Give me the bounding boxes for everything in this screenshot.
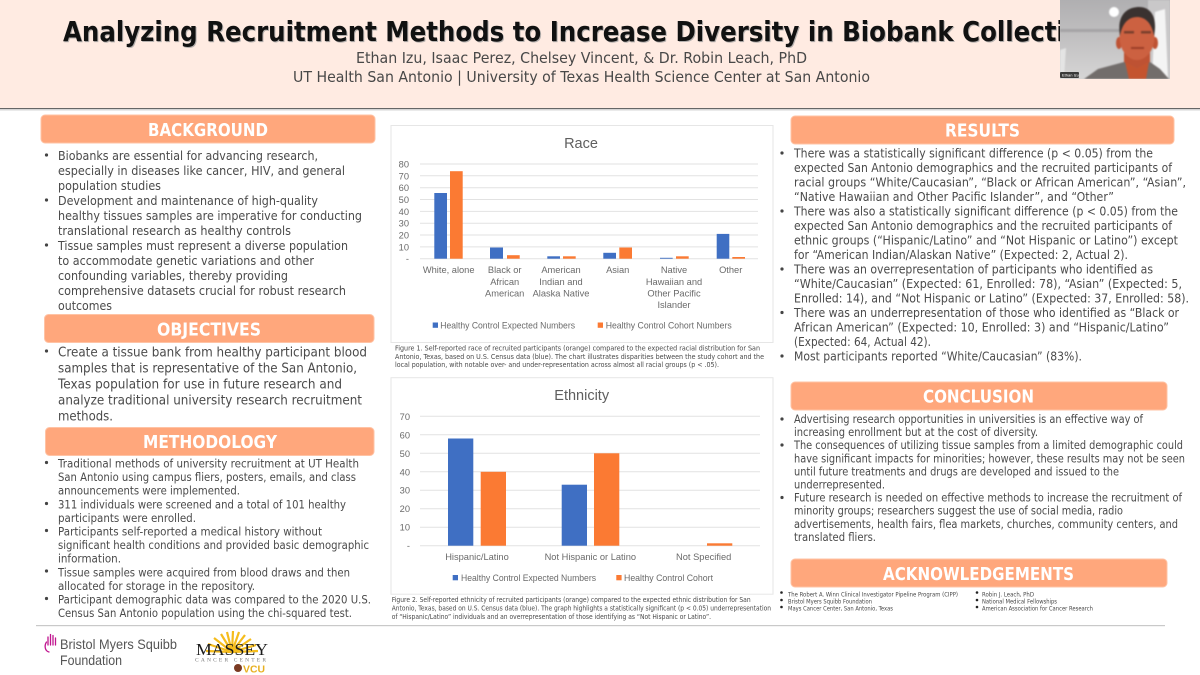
y axis labels: ethnicity: 30 xyxy=(400,486,410,496)
text block: conclusion bullets: Advertising research opportunities in universities is an effective way of xyxy=(794,413,1144,426)
heading: results: RESULTS xyxy=(945,122,1020,142)
text block: methodology bullets: Tissue samples were acquired from blood draws and then xyxy=(57,565,350,579)
category labels: ethnicity: Hispanic/Latino xyxy=(445,552,509,562)
header band xyxy=(0,0,1200,110)
cohort bars: ethnicity xyxy=(481,453,732,546)
y axis labels: ethnicity: 50 xyxy=(400,449,410,459)
text block: methodology bullets: announcements were implemented. xyxy=(58,484,240,498)
text block: acknowledgements left column: Mays Cancer Center, San Antonio, Texas xyxy=(788,606,893,612)
y axis labels: race: 70 xyxy=(399,171,409,181)
text block: conclusion bullets: minority groups; researchers suggest the use of social media, radio xyxy=(794,505,1123,518)
text block: background bullets: comprehensive datasets crucial for robust research xyxy=(58,283,346,298)
text block: objectives bullet: samples that is representative of the San Antonio, xyxy=(58,362,357,376)
text block: methodology bullets: San Antonio using campus fliers, posters, emails, and class xyxy=(58,470,356,484)
heading: conclusion xyxy=(791,382,1167,410)
category labels: race: Alaska Native xyxy=(533,288,589,298)
heading: methodology xyxy=(46,428,374,456)
y axis labels: ethnicity: 40 xyxy=(400,467,410,477)
caption: figure 2 xyxy=(392,595,771,621)
panel: background xyxy=(41,115,375,313)
text block: objectives bullet: Texas population for use in future research and xyxy=(57,378,342,392)
y axis labels: ethnicity: 70 xyxy=(400,412,410,422)
expected bars: race xyxy=(434,193,729,259)
category labels: ethnicity: Not Specified xyxy=(676,552,731,562)
text block: methodology bullets: information. xyxy=(58,552,121,566)
logo: Bristol Myers Squibb Foundation: Bristol Myers Squibb xyxy=(60,636,177,652)
heading: background: BACKGROUND xyxy=(148,121,268,141)
category labels: race: American xyxy=(485,288,524,298)
heading: acknowledgements: ACKNOWLEDGEMENTS xyxy=(883,565,1074,585)
text block: acknowledgements right column: American Association for Cancer Research xyxy=(982,606,1093,612)
y axis labels: race: 10 xyxy=(399,242,409,252)
legend: ethnicity xyxy=(453,573,713,583)
y axis labels: ethnicity: - xyxy=(407,541,410,551)
logo: Massey Cancer Center VCU: MASSEY xyxy=(196,640,268,659)
category labels: race: Hawaiian and xyxy=(646,277,702,287)
affiliation: UT Health San Antonio | University of Texas Health Science Center at San Antonio xyxy=(293,68,870,86)
category labels: ethnicity: Not Hispanic or Latino xyxy=(545,552,636,562)
category labels: race: Other xyxy=(719,265,742,275)
y axis labels: race: - xyxy=(406,254,409,264)
y axis labels: ethnicity: 60 xyxy=(400,430,410,440)
panel: methodology xyxy=(45,428,374,620)
heading: background xyxy=(41,115,375,143)
text block: background bullets: especially in diseases like cancer, HIV, and general xyxy=(58,163,345,178)
text block: conclusion bullets: translated fliers. xyxy=(794,531,876,544)
category labels: race: African xyxy=(490,277,519,287)
text block: conclusion bullets xyxy=(780,413,1185,544)
caption: figure 2: Figure 2. Self-reported ethnicity of recruited participants (orange) compared to the expected ethnic distribution for San xyxy=(392,595,751,604)
text block: conclusion bullets: underrepresented. xyxy=(794,478,885,492)
text block: acknowledgements right column: Robin J. Leach, PhD xyxy=(982,592,1034,598)
text block: acknowledgements left column: Bristol Myers Squibb Foundation xyxy=(788,598,872,606)
caption: figure 1 xyxy=(395,344,764,369)
category labels: race: Black or xyxy=(488,265,521,275)
heading: objectives: OBJECTIVES xyxy=(157,320,261,340)
y axis labels: race: 80 xyxy=(399,160,409,170)
text block: objectives bullet: methods. xyxy=(58,410,113,424)
text block: background bullets: Tissue samples must represent a diverse population xyxy=(57,238,348,253)
heading: objectives xyxy=(44,314,374,342)
text block: objectives bullet: analyze traditional university research recruitment xyxy=(58,394,362,408)
legend: ethnicity: Healthy Control Cohort xyxy=(624,573,713,583)
logo: Massey Cancer Center VCU xyxy=(195,631,268,675)
y axis labels: race: 50 xyxy=(399,195,409,205)
logo: Bristol Myers Squibb Foundation xyxy=(45,634,177,668)
panel: results xyxy=(780,116,1189,364)
panel: conclusion xyxy=(780,382,1185,544)
text block: results bullets: There was an overrepresentation of participants who identified as xyxy=(793,262,1153,276)
text block: results bullets: “Native Hawaiian and Other Pacific Islander”, and “Other” xyxy=(794,190,1114,204)
text block: methodology bullets: Census San Antonio population using the chi-squared test. xyxy=(58,606,352,620)
text block: acknowledgements right column xyxy=(976,591,1093,612)
logo: Massey Cancer Center VCU: CANCER CENTER xyxy=(195,658,266,664)
text block: methodology bullets: Participant demographic data was compared to the 2020 U.S. xyxy=(58,592,371,606)
text block: methodology bullets: participants were enrolled. xyxy=(58,511,196,525)
logo: Bristol Myers Squibb Foundation: Foundation xyxy=(60,652,122,668)
text block: methodology bullets: allocated for storage in the repository. xyxy=(58,579,255,593)
webcam thumbnail of presenter xyxy=(1060,0,1170,79)
text block: background bullets: population studies xyxy=(58,178,161,193)
caption: figure 1: Figure 1. Self-reported race of recruited participants (orange) compared to the expected racial distribution for San xyxy=(395,344,760,352)
authors: Ethan Izu, Isaac Perez, Chelsey Vincent, & Dr. Robin Leach, PhD xyxy=(356,49,807,67)
text block: results bullets: (Expected: 64, Actual 42). xyxy=(794,335,931,349)
text block: results bullets: African American” (Expected: 10, Enrolled: 3) and “Hispanic/Latino” xyxy=(794,320,1169,334)
category labels: race: American xyxy=(541,265,581,275)
cohort bars: race xyxy=(450,171,745,259)
text block: background bullets xyxy=(45,148,362,313)
text block: methodology bullets: Traditional methods of university recruitment at UT Health xyxy=(57,456,359,470)
caption: figure 1: local population, with notable over- and under-representation across almost all racial groups (p < .05). xyxy=(395,360,719,369)
y axis labels: race: 60 xyxy=(399,183,409,193)
panel: objectives xyxy=(44,314,374,424)
text block: results bullets: for “American Indian/Alaskan Native” (Expected: 2, Actual 2). xyxy=(794,248,1128,262)
icon: sunburst xyxy=(206,631,258,652)
text block: background bullets: Development and maintenance of high-quality xyxy=(58,193,318,208)
category labels: race: Native xyxy=(661,265,687,275)
webcam thumbnail of presenter: Ethan Izu xyxy=(1062,72,1079,78)
text block: methodology bullets: Participants self-reported a medical history without xyxy=(58,524,322,538)
text block: background bullets: to accommodate genetic variations and other xyxy=(58,253,315,268)
category labels: race: Other Pacific xyxy=(647,288,701,298)
category labels: race: Asian xyxy=(606,265,629,275)
caption: figure 2: Antonio, Texas, based on U.S. Census data (blue). The graph highlights a statistically significant (p < 0.05) underrepresentation xyxy=(392,604,771,612)
y axis labels: race: 40 xyxy=(399,207,409,217)
text block: results bullets: ethnic groups (“Hispanic/Latino” and “Not Hispanic or Latino”) except xyxy=(794,234,1178,248)
text block: results bullets: There was a statistically significant difference (p < 0.05) from the xyxy=(793,146,1153,160)
text block: conclusion bullets: increasing enrollment but at the cost of diversity. xyxy=(794,426,1038,439)
text block: results bullets: Most participants reported “White/Caucasian” (83%). xyxy=(794,350,1082,364)
text block: background bullets: translational research as healthy controls xyxy=(58,223,291,238)
bar chart: ethnicity xyxy=(391,378,773,594)
text block: methodology bullets xyxy=(45,456,371,620)
legend: ethnicity: Healthy Control Expected Numbers xyxy=(461,573,596,583)
y axis labels: ethnicity: 20 xyxy=(400,504,410,514)
text block: background bullets: healthy tissues samples are imperative for conducting xyxy=(58,208,362,223)
text block: objectives bullet xyxy=(45,346,367,424)
text block: methodology bullets: significant health conditions and provided basic demographic xyxy=(58,538,369,552)
text block: conclusion bullets: until future treatments and drugs are developed and issued to the xyxy=(794,465,1119,478)
bar chart: race xyxy=(391,126,773,342)
heading: conclusion: CONCLUSION xyxy=(923,387,1034,407)
y axis labels: race: 30 xyxy=(399,219,409,229)
text block: results bullets xyxy=(780,146,1189,364)
text block: acknowledgements left column: The Robert A. Winn Clinical Investigator Pipeline Program (CIPP) xyxy=(787,592,958,598)
icon: magenta hand xyxy=(45,634,56,652)
panel: acknowledgements xyxy=(780,559,1167,612)
y axis labels: race: 20 xyxy=(399,230,409,240)
caption: figure 2: of “Hispanic/Latino” individuals and an overrepresentation of those identifying as “Not Hispanic or Latino”. xyxy=(392,612,711,621)
heading: acknowledgements xyxy=(791,559,1167,587)
legend: race: Healthy Control Cohort Numbers xyxy=(606,320,732,330)
category labels: race: Indian and xyxy=(539,277,583,287)
category labels: race: White, alone xyxy=(423,265,475,275)
category labels: race: Islander xyxy=(657,300,691,310)
text block: methodology bullets: 311 individuals were screened and a total of 101 healthy xyxy=(58,497,346,511)
text block: acknowledgements right column: National Medical Fellowships xyxy=(982,598,1057,606)
category labels: race xyxy=(423,265,742,310)
expected bars: ethnicity xyxy=(448,438,587,546)
category labels: ethnicity xyxy=(445,552,731,562)
legend: race xyxy=(433,320,732,330)
chart title: ethnicity: Ethnicity xyxy=(554,388,610,404)
heading: results xyxy=(791,116,1174,144)
text block: objectives bullet: Create a tissue bank from healthy participant blood xyxy=(58,346,367,360)
chart title: race: Race xyxy=(564,136,598,152)
text block: acknowledgements left column xyxy=(780,591,958,612)
text block: background bullets: outcomes xyxy=(58,298,112,313)
y axis labels: ethnicity: 10 xyxy=(400,523,410,533)
legend: race: Healthy Control Expected Numbers xyxy=(440,320,575,330)
heading: methodology: METHODOLOGY xyxy=(143,433,277,453)
y axis labels: ethnicity xyxy=(400,412,410,551)
caption: figure 1: Antonio, Texas, based on U.S. Census data (blue). The chart illustrates disparities between the study cohort and the xyxy=(395,352,764,361)
y axis labels: race xyxy=(399,160,409,264)
text block: background bullets: Biobanks are essential for advancing research, xyxy=(58,148,318,163)
text block: background bullets: confounding variables, thereby providing xyxy=(58,268,288,283)
